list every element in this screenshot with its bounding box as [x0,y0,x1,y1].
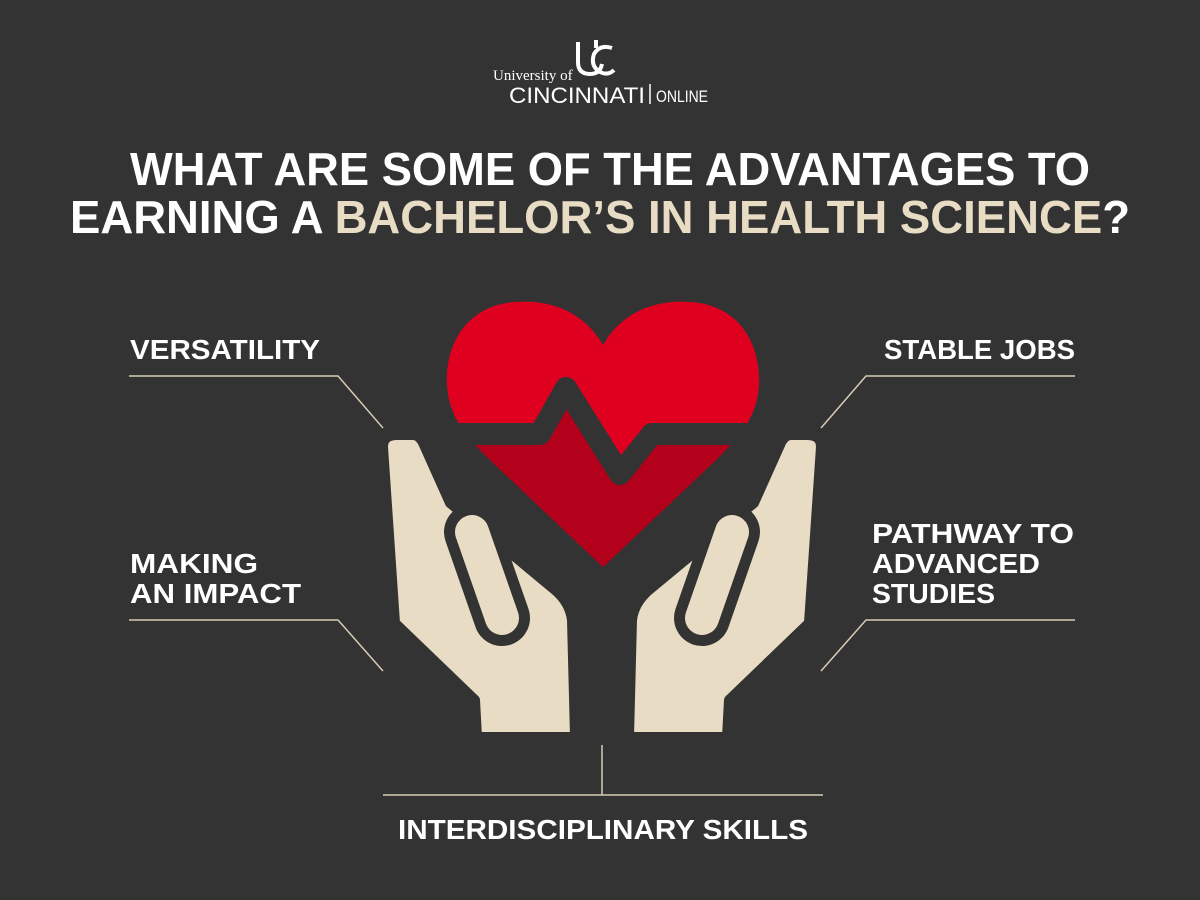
label: versatility: VERSATILITY [130,334,320,365]
icon: heart with heartbeat [446,302,760,567]
icon: right hand [629,435,821,737]
logo [493,40,708,108]
title: WHAT ARE SOME OF THE ADVANTAGES TO [130,143,1090,195]
label: making an impact: AN IMPACT [130,578,301,609]
label: interdisciplinary skills: INTERDISCIPLINARY SKILLS [398,814,808,845]
label: making an impact: MAKING [130,548,258,579]
label: pathway to advanced studies: ADVANCED [872,548,1040,579]
label: versatility [129,334,383,428]
icon: left hand [383,435,575,737]
label: pathway to advanced studies: STUDIES [872,578,995,609]
title: EARNING A BACHELOR’S IN HEALTH SCIENCE? [70,191,1130,243]
logo: University of [493,68,573,84]
logo: CINCINNATI [509,83,645,108]
label: pathway to advanced studies: PATHWAY TO [872,518,1074,549]
label: pathway to advanced studies [821,518,1075,671]
logo: ONLINE [656,87,708,106]
logo mark UC [578,40,614,74]
title [70,143,1130,243]
label: making an impact [129,548,383,671]
label: stable jobs: STABLE JOBS [884,334,1075,365]
label: stable jobs [821,334,1075,428]
